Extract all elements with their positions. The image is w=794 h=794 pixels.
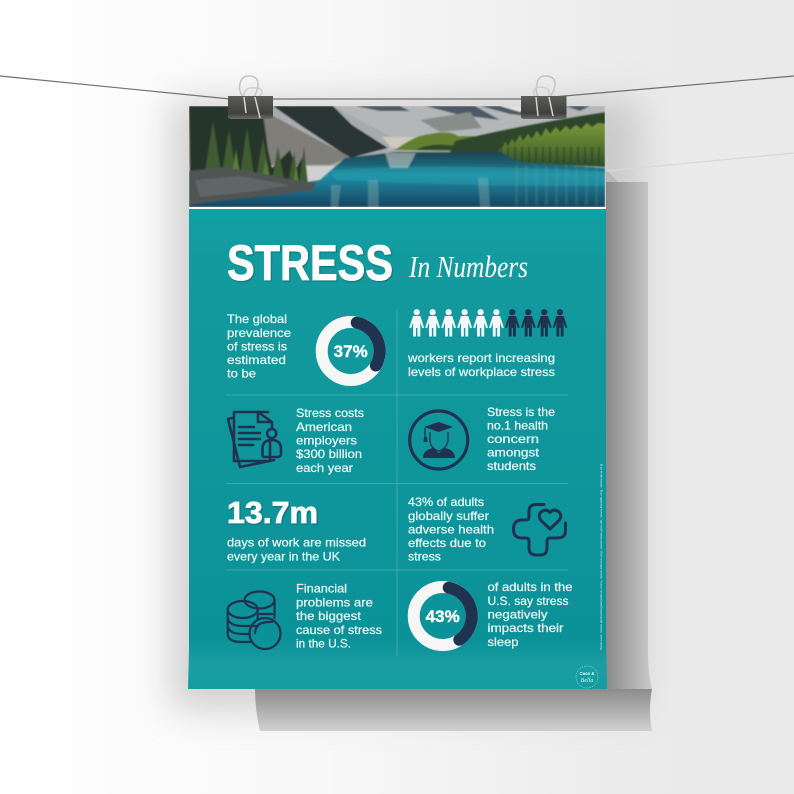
logo: Coco and Bella [576,666,598,688]
donut chart: 43% [414,587,472,645]
text: global prevalence: of stress is [227,340,287,354]
stat: 13.7m days missed [227,495,366,564]
text: no.1 concern: no.1 health [487,420,548,432]
text: global prevalence: to be [227,368,256,380]
faint second wire shadow [606,153,794,171]
logo: Coco and Bella: Bella [581,678,593,684]
photo: mountain lake [189,106,605,207]
text: financial: Financial [296,582,347,596]
left forest [189,106,304,182]
text: global prevalence [227,313,291,380]
donut chart: 37% [322,322,380,380]
text: no.1 concern: concern [487,433,539,446]
text: 43% of adults [408,496,494,564]
text: financial: the biggest [296,610,362,623]
text: stress costs: $300 billion [296,448,362,461]
teal panel [188,209,607,689]
white band [189,207,606,209]
text: days of work [227,536,366,564]
text: stress costs: employers [296,434,357,448]
stat: student health concern [410,406,555,473]
soft wall shadow [170,100,640,710]
icon: medical cross with heart [514,504,566,555]
text: sleep: impacts their [488,622,564,635]
text: 43% of adults: adverse health [408,524,494,536]
text: sleep: U.S. say stress [488,595,569,608]
text: financial [296,582,382,650]
text: no.1 concern: Stress is the [487,406,555,419]
hard cast shadow [255,170,652,731]
big number: 13.7m [227,495,318,530]
text: sleep: sleep [488,636,518,649]
text: 43% of adults: stress [408,550,441,564]
text: no.1 concern: students [487,460,536,473]
heading: STRESS: STRESS [227,235,393,291]
donut chart: 37%: 37% [334,342,368,361]
text: 43% of adults: effects due to [408,537,486,550]
title [227,235,528,291]
text: 43% of adults: globally suffer [408,510,489,523]
text: financial: in the U.S. [296,638,351,650]
source microtext: Sources: www.globalorganisation.com, www.stress.org, www.hse.gov.uk, www.health.org, www.apa.org [599,464,603,650]
text: workers report: levels of workplace stress [408,366,555,379]
water [189,152,605,207]
text: financial: problems are [296,596,373,610]
grid dividers [226,309,568,656]
icon: document and person [228,412,281,467]
text: stress costs: each year [296,462,353,475]
stat: workers pictogram [407,309,567,379]
stat: sleep 43% [414,581,572,649]
poster [188,106,607,689]
text: global prevalence: prevalence [227,327,291,340]
forest right [499,123,605,167]
icon: coin stacks [228,592,280,649]
text: sleep: negatively [488,608,548,622]
stat: cost to employers [228,407,364,475]
text: days of work: every year in the UK [227,550,340,564]
subheading: In Numbers: In Numbers [408,249,528,284]
right binder clip [521,76,566,119]
text: days of work: days of work are missed [227,536,366,550]
donut chart: 43%: 43% [426,607,460,626]
rocks [189,167,317,205]
text: workers report [407,352,555,379]
text: 43% of adults: 43% of adults [408,496,484,509]
text: stress costs: American [296,421,352,434]
text: sleep [488,581,572,649]
hanging wire [0,76,794,99]
text: global prevalence: The global [227,313,287,326]
pictogram: 6 of 10 workers [409,309,567,336]
text: sleep: of adults in the [488,581,572,594]
logo: Coco and Bella: Coco & [579,671,595,676]
text: no.1 concern: amongst [487,446,540,460]
text: stress costs: Stress costs [296,407,364,420]
stat: global prevalence 37% [227,313,380,380]
left binder clip [228,76,273,119]
text: no.1 concern [487,406,555,473]
text: global prevalence: estimated [227,354,286,367]
text: financial: cause of stress [296,624,382,637]
icon: graduate in circle [410,411,468,469]
text: stress costs [296,407,364,475]
text: workers report: workers report increasing [407,352,555,365]
stat: financial problems [228,582,382,650]
stat: adverse health effects [408,496,566,564]
